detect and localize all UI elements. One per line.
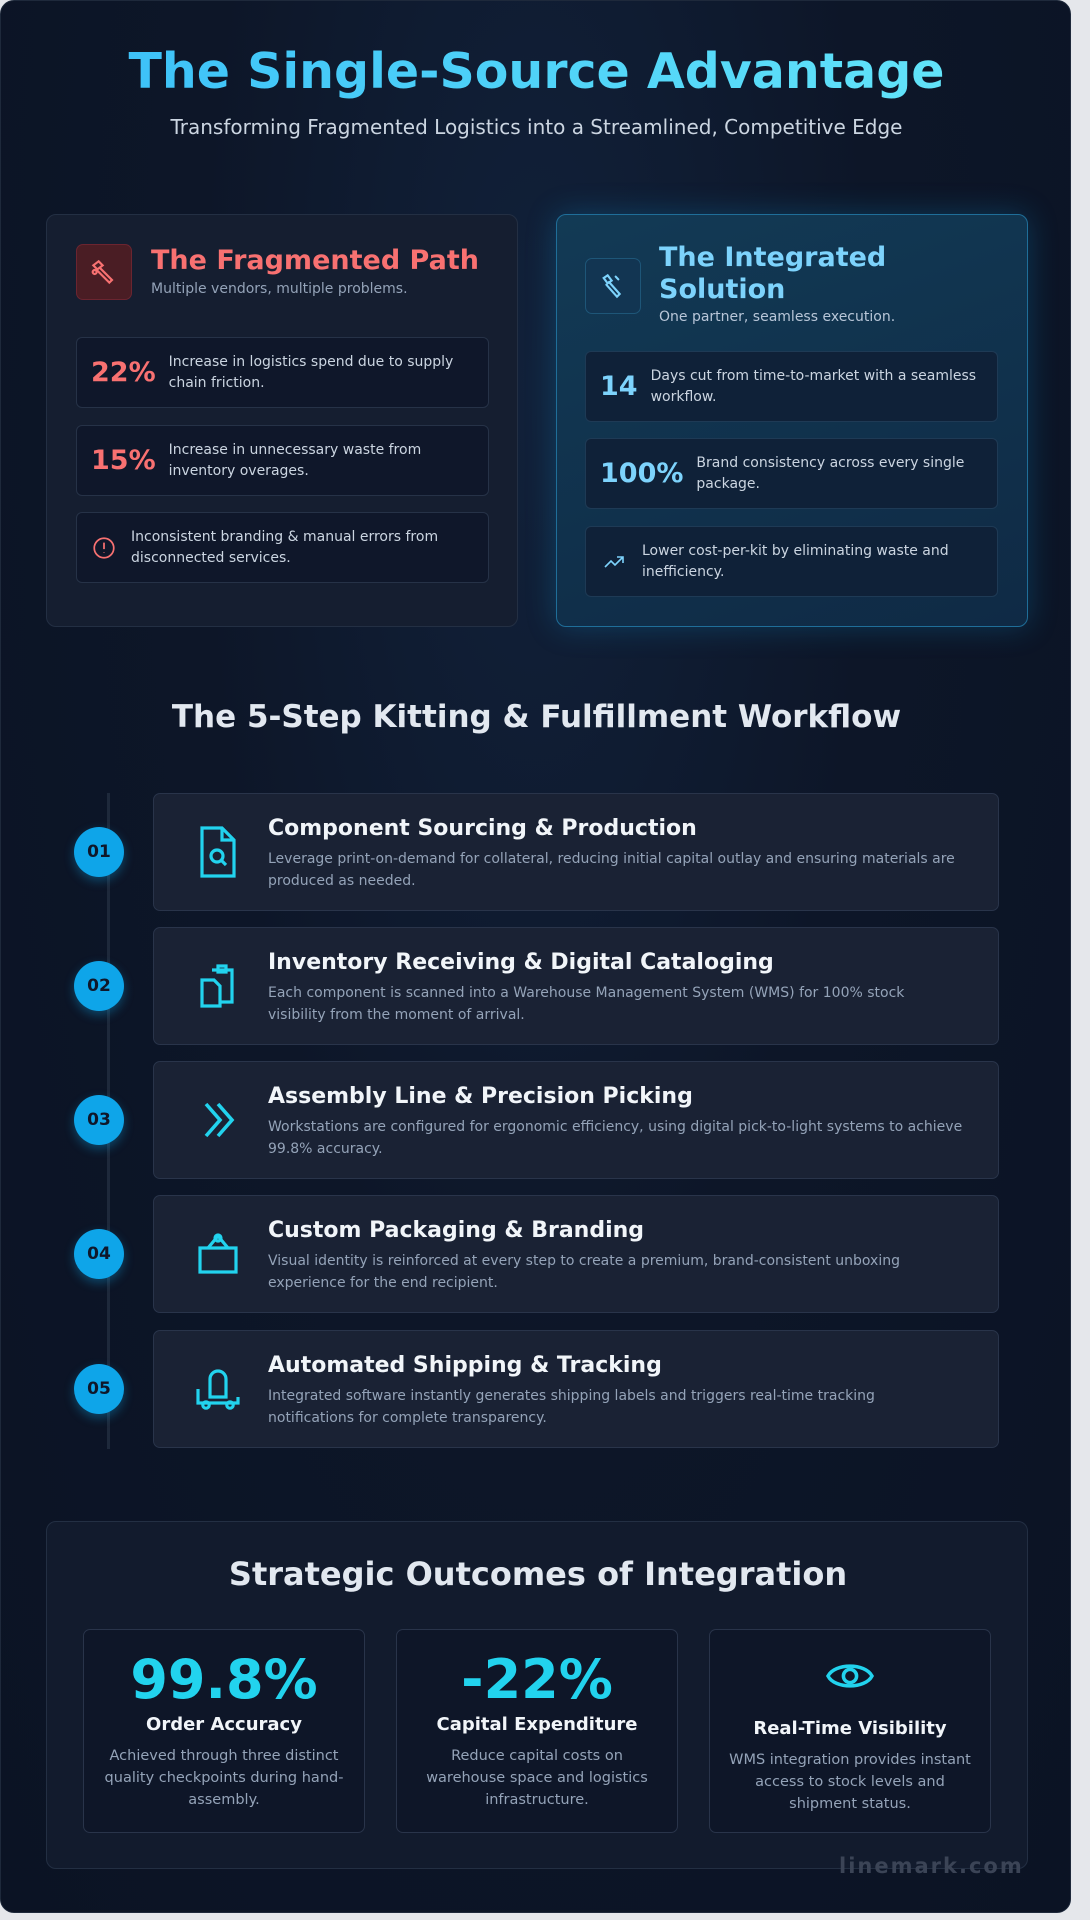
step 2: Each component is scanned into a Warehouse Management System (WMS) for 100% stock: [268, 985, 904, 1001]
step 1 badge: [74, 827, 124, 877]
panel subtitle: One partner, seamless execution.: [659, 309, 895, 325]
step 2: Inventory Receiving & Digital Cataloging: [268, 950, 774, 975]
step 3: [153, 1061, 999, 1179]
panel subtitle: Multiple vendors, multiple problems.: [151, 281, 408, 297]
icon: tool: [585, 258, 641, 314]
timeline line: [107, 793, 110, 1449]
stat: 100%: 100%: [600, 458, 683, 489]
outcome: accuracy: Achieved through three distinct quality checkpoints during hand-assembly.: [105, 1748, 343, 1808]
stat: trend: Lower cost-per-kit by eliminating waste and: [642, 542, 949, 558]
stat: 15%: inventory overages.: [169, 462, 309, 478]
heading: The Fragmented Path: [151, 245, 479, 276]
step 3 badge: 03: [87, 1110, 111, 1130]
stat: 14: [585, 351, 998, 422]
stat: 100%: Brand consistency across every single: [696, 454, 964, 470]
step 1: Component Sourcing & Production: [268, 816, 697, 841]
step 1: [153, 793, 999, 911]
heading: Solution: [659, 274, 785, 305]
step 2 badge: 02: [87, 976, 111, 996]
stat: 14: workflow.: [651, 388, 716, 404]
panel: fragmented path: [46, 214, 518, 627]
stat: 15%: Increase in unnecessary waste from: [169, 442, 421, 458]
stat: 22%: Increase in logistics spend due to supply: [169, 354, 453, 370]
stat: 100%: [585, 438, 998, 509]
icon: clipboards: [200, 964, 234, 1008]
stat: 15%: [76, 425, 489, 496]
step 5: [153, 1330, 999, 1448]
stat: 14: Days cut from time-to-market with a seamless: [651, 368, 976, 384]
subtitle: Transforming Fragmented Logistics into a Streamlined, Competitive Edge: [170, 115, 902, 139]
step 3: Assembly Line & Precision Picking: [268, 1084, 693, 1109]
step 1 badge: 01: [87, 842, 111, 862]
step 5: Integrated software instantly generates shipping labels and triggers real-time tracking: [268, 1388, 875, 1404]
stat: trend: [585, 526, 998, 597]
outcome: accuracy: [83, 1629, 365, 1833]
step 5 badge: [74, 1364, 124, 1414]
stat: alert: disconnected services.: [131, 550, 291, 566]
step 4: experience for the end recipient.: [268, 1275, 498, 1291]
outcomes title: Strategic Outcomes of Integration: [229, 1555, 847, 1593]
stat: 15%: 15%: [91, 445, 156, 476]
outcome: visibility: WMS integration provides instant access to stock levels and shipment status.: [729, 1752, 971, 1812]
stat: 100%: package.: [696, 476, 760, 492]
step 2: visibility from the moment of arrival.: [268, 1007, 525, 1023]
outcome: capex: [396, 1629, 678, 1833]
heading: The Integrated: [659, 242, 886, 273]
stat: trend: inefficiency.: [642, 564, 724, 580]
title: The Single-Source Advantage: [128, 43, 945, 100]
step 4: Visual identity is reinforced at every step to create a premium, brand-consistent unboxing: [268, 1253, 900, 1269]
panel: strategic outcomes: [46, 1521, 1028, 1869]
stat: alert: Inconsistent branding & manual errors from: [131, 528, 438, 544]
step 4: [153, 1195, 999, 1313]
heading: [659, 242, 886, 305]
outcome: accuracy: Order Accuracy: [146, 1714, 302, 1735]
icon: package: [198, 1233, 238, 1274]
step 4 badge: [74, 1229, 124, 1279]
section title: workflow: The 5-Step Kitting & Fulfillment Workflow: [172, 699, 901, 735]
step 5: notifications for complete transparency.: [268, 1410, 547, 1426]
outcome: visibility: Real-Time Visibility: [753, 1718, 947, 1739]
step 1: Leverage print-on-demand for collateral, reducing initial capital outlay and ensuring materials are produced as needed.: [268, 851, 955, 889]
panel: integrated solution: [556, 214, 1028, 627]
icon: eye: [826, 1664, 874, 1688]
stat: 22%: 22%: [91, 357, 156, 388]
icon: document search: [200, 826, 236, 878]
step 3: Workstations are configured for ergonomic efficiency, using digital pick-to-light systems to achieve 99.8% accuracy.: [268, 1119, 962, 1157]
step 5 badge: 05: [87, 1379, 111, 1399]
stat: 22%: chain friction.: [169, 374, 265, 390]
outcome: capex: Capital Expenditure: [436, 1714, 637, 1735]
stat: 22%: [76, 337, 489, 408]
icon: broken tool: [76, 244, 132, 300]
step 3 badge: [74, 1095, 124, 1145]
stat: alert: [76, 512, 489, 583]
outcome: capex: -22%: [461, 1648, 613, 1711]
watermark: linemark.com: [839, 1854, 1024, 1878]
outcome: capex: Reduce capital costs on warehouse space and logistics infrastructure.: [426, 1748, 648, 1808]
step 5: Automated Shipping & Tracking: [268, 1353, 662, 1378]
icon: chevrons: [204, 1102, 234, 1138]
step 4 badge: 04: [87, 1244, 111, 1264]
stat: 14: 14: [600, 371, 638, 402]
icon: truck: [196, 1369, 240, 1410]
outcome: accuracy: 99.8%: [130, 1648, 318, 1711]
step 2 badge: [74, 961, 124, 1011]
step 4: Custom Packaging & Branding: [268, 1218, 644, 1243]
step 2: [153, 927, 999, 1045]
outcome: visibility: [709, 1629, 991, 1833]
